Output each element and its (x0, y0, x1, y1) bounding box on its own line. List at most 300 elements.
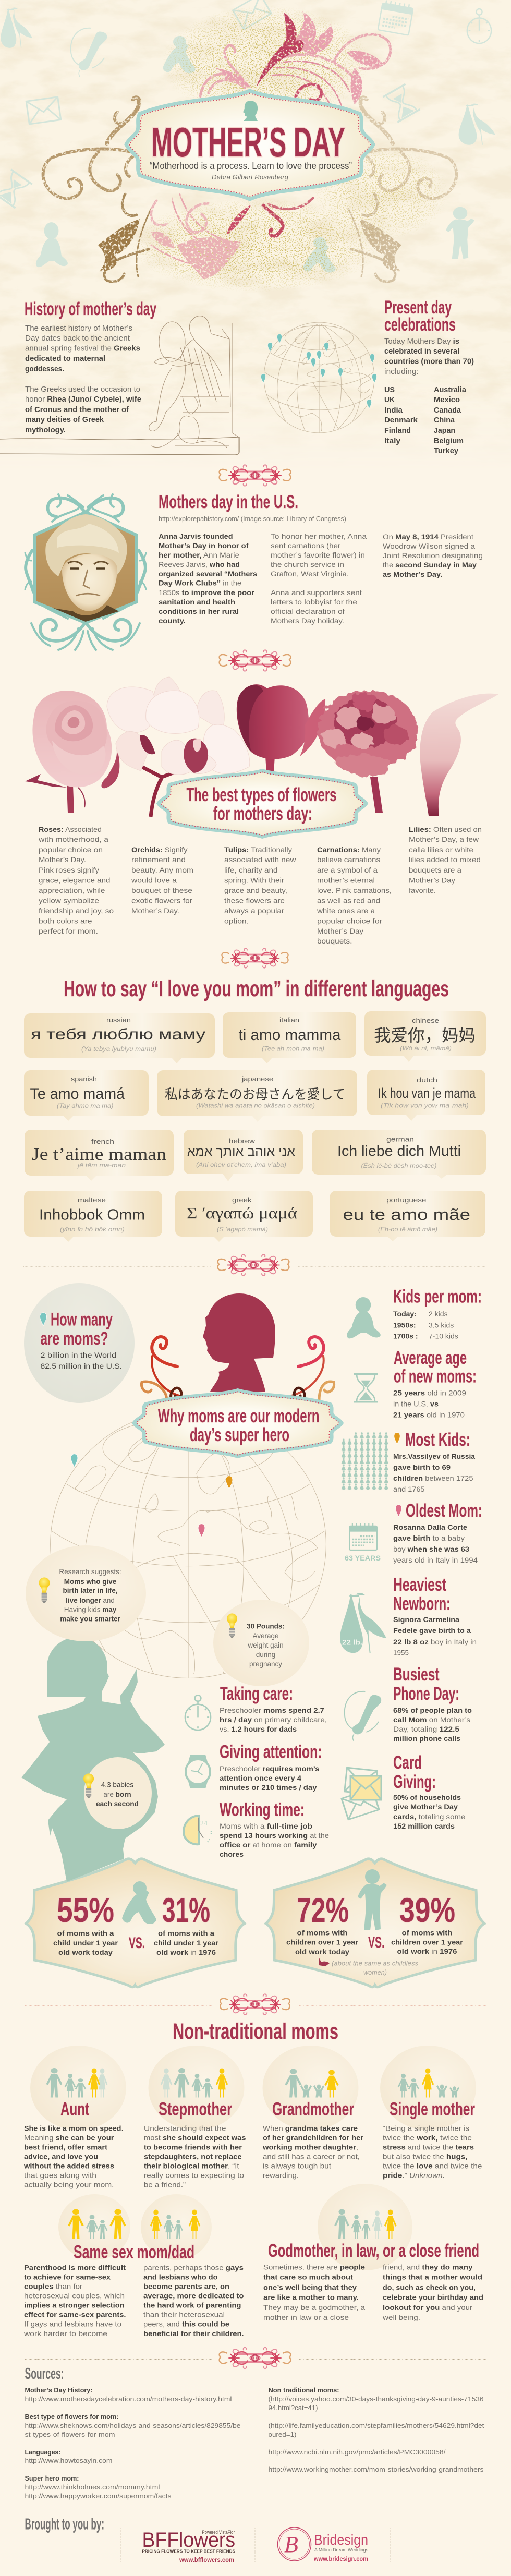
stat: average age: 25 years old in 2009 (393, 1388, 466, 1397)
stat: giving attention: minutes or 210 times / day (220, 1783, 317, 1792)
text column 1: county. (159, 616, 186, 625)
panel: working moms under 1 year: 31% (162, 1891, 210, 1929)
stat: giving attention (186, 1742, 322, 1792)
country list: India (384, 406, 403, 415)
bubble: japanese: (Watashi wa anata no okāsan o aishite) (196, 1102, 315, 1109)
card: stepmother: really comes to expecting to (144, 2171, 244, 2179)
bubble: spanish: spanish (71, 1075, 97, 1083)
card: same sex mom/dad: effect for same-sex parents. (24, 2311, 126, 2319)
panel: working moms over 1 year: 39% (399, 1891, 455, 1929)
heading: History of mother’s day (25, 299, 156, 319)
sources column right: Non traditional moms: (268, 2387, 339, 2394)
text: carnations: mother’s eternal (317, 876, 375, 885)
text: roses (38, 825, 114, 935)
card: same sex mom/dad: work harder to become (23, 2329, 107, 2338)
callout: research suggests: Having kids may (64, 1605, 117, 1614)
faint icons (0, 0, 495, 272)
illustration: goddess statue (149, 316, 239, 454)
panel: working moms under 1 year: old work today (58, 1948, 113, 1956)
logo: Bridesign (277, 2527, 368, 2562)
divider ornament 3 (25, 948, 486, 968)
title badge (126, 91, 373, 199)
text: carnations: white ones are a (317, 906, 375, 915)
text column 1: organized several “Mothers (159, 570, 257, 578)
panel: working moms under 1 year: VS. (129, 1934, 145, 1952)
logo: Bridesign: B (284, 2532, 298, 2557)
text: orchids: exotic flowers for (131, 896, 192, 904)
bubble: maltese (24, 1191, 162, 1242)
stat: heaviest newborn: Newborn: (393, 1594, 451, 1614)
card: godmother: mother in law or a close (263, 2313, 349, 2321)
text block: countries (more than 70) (384, 357, 474, 366)
stat: busiest phone day: million phone calls (393, 1734, 460, 1743)
stat: working time: Moms with a full-time job (220, 1822, 312, 1830)
text: lilies: Mother’s Day, a few (409, 835, 479, 843)
callout: babies born: 4.3 babies (101, 1781, 133, 1789)
sources column right: http://www.workingmother.com/mom-stories/working-grandmothers (268, 2466, 484, 2473)
card: grandmother (262, 2046, 364, 2179)
text: carnations: believe carnations (317, 855, 380, 864)
logo: BFFlowers: Powered VistaFlor (202, 2530, 235, 2535)
stat: taking care: Taking care: (220, 1684, 293, 1704)
sources column left (25, 2387, 241, 2500)
text: lilies: lilies added to mixed (409, 855, 481, 864)
stat: busiest phone day: Day, totaling 122.5 (393, 1725, 459, 1733)
stat: heaviest newborn (340, 1575, 477, 1656)
bubble: german: german (386, 1135, 414, 1143)
card: same sex mom/dad: and lesbians who do (143, 2273, 218, 2281)
bubble: german: Ich liebe dich Mutti (337, 1143, 461, 1159)
card: godmother: friend, and they do many (383, 2263, 473, 2271)
text: tulips: Tulips: Traditionally (224, 845, 292, 854)
text: carnations (317, 845, 392, 945)
callout: 30 pounds: weight gain (247, 1641, 284, 1649)
card: godmother: lookout for you and your (383, 2303, 472, 2312)
parchment texture (0, 0, 511, 469)
bubble: russian (24, 1013, 215, 1063)
sources column left: Mother’s Day History: (25, 2387, 93, 2394)
text block: Today Mothers Day is (384, 337, 459, 346)
text: roses: perfect for mom. (39, 927, 98, 935)
sources column left: http://www.sheknows.com/holidays-and-seasons/articles/829855/be (25, 2422, 241, 2429)
bubble: portuguese (330, 1191, 485, 1241)
country list: Finland (384, 426, 411, 435)
card: same sex mom/dad: than their heterosexual (143, 2311, 225, 2319)
callout: how many are moms (24, 1283, 135, 1403)
stat: busiest phone day (345, 1664, 472, 1743)
card: aunt: advice, and love you (24, 2152, 98, 2160)
stat: card giving: Giving: (393, 1772, 436, 1792)
stat: kids per mom: Today: (393, 1310, 417, 1318)
bubble: portuguese: eu te amo mãe (343, 1205, 470, 1224)
card: godmother: one’s well being that they (263, 2283, 357, 2292)
bubble: japanese: 私はあなたのお母さんを愛して (165, 1084, 345, 1103)
stat: card giving: cards, totaling some (393, 1812, 466, 1821)
image source: http://explorepahistory.com/ (Image source: Library of Congress) (159, 515, 346, 523)
card: single mother: stress and twice the tears (383, 2143, 474, 2151)
quote author: Debra Gilbert Rosenberg (212, 173, 289, 181)
flowers title badge (159, 771, 366, 837)
text column 2: mother’s favorite flower) in (271, 551, 365, 559)
text: orchids: Mother’s Day. (131, 906, 179, 915)
card: single mother: “Being a single mother is (383, 2124, 469, 2132)
stat: oldest mom (345, 1501, 482, 1564)
text: tulips (224, 845, 296, 925)
text column 1: 1850s to improve the poor (159, 588, 255, 597)
portrait frame with flourishes (25, 494, 146, 650)
card: godmother: They may be a godmother, a (263, 2303, 365, 2312)
card: same sex mom/dad: become parents are, on (143, 2282, 229, 2291)
text column 3: the second Sunday in May (383, 561, 477, 569)
text column 1 (159, 532, 257, 625)
stat: most kids: Most Kids: (405, 1430, 470, 1450)
callout: 30 pounds: Average (252, 1632, 279, 1640)
card: stepmother: Stepmother (159, 2099, 232, 2120)
brown flourish left (43, 98, 151, 282)
header panel (0, 0, 495, 292)
icon: mother silhouette (243, 101, 258, 121)
stat: most kids: children between 1725 (393, 1474, 473, 1482)
stat: kids per mom: 3.5 kids (429, 1321, 454, 1329)
panel: working moms over 1 year: VS. (368, 1934, 385, 1951)
text: carnations: popular choice for (317, 917, 382, 925)
callout: 30 pounds: 30 Pounds: (247, 1622, 285, 1630)
illustration: orchid (107, 677, 250, 817)
chart: big globe (51, 1411, 326, 1678)
stat: working time (184, 1799, 329, 1858)
stat: oldest mom: 63 YEARS (345, 1554, 381, 1562)
card: single mother: but also twice the hugs, (383, 2152, 467, 2160)
heading: Present day (384, 297, 452, 318)
callout: babies born: each second (96, 1800, 139, 1808)
heading: Sources: (25, 2364, 64, 2383)
card: aunt (23, 2046, 126, 2188)
card: same sex mom/dad: parents, perhaps those gays (143, 2264, 244, 2272)
stat: kids per mom: 2 kids (429, 1310, 448, 1318)
callout: how many are moms: 2 billion in the World (41, 1351, 116, 1359)
divider ornament 4 (23, 1254, 485, 1276)
card: stepmother (144, 2046, 246, 2188)
text block (25, 324, 141, 434)
card: same sex mom/dad: heterosexual couples, which (24, 2292, 125, 2300)
panel: working moms over 1 year: old work today (295, 1948, 349, 1956)
text column 1: sanitation and health (159, 598, 235, 606)
card: same sex mom/dad: If gays and lesbians have to (24, 2320, 121, 2328)
card: same sex mom/dad: implies a stronger selection (24, 2301, 124, 2309)
text: roses: appreciation, while (39, 886, 105, 894)
text: roses: friendship and joy, so (39, 906, 114, 915)
panel: working moms over 1 year: of moms with (297, 1929, 347, 1937)
heading: Mothers day in the U.S. (159, 492, 298, 512)
panel: working moms under 1 year: of moms with a (57, 1929, 114, 1937)
country list: Mexico (434, 395, 460, 404)
text: orchids: beauty. Any mom (131, 866, 193, 874)
sources column right: (http://voices.yahoo.com/30-days-thanksgiving-day-9-aunties-71536 (268, 2396, 484, 2403)
brown flourish right (348, 98, 456, 282)
card: aunt: without the added stress (23, 2161, 114, 2170)
text column 3: as Mother’s Day. (383, 570, 442, 578)
text: lilies (409, 825, 482, 894)
stat: taking care (185, 1684, 327, 1733)
callout: how many are moms: 82.5 million in the U.S. (41, 1362, 122, 1370)
text: lilies: Mother’s Day (409, 876, 455, 885)
bubble: german: (Ēsh lē-bē dēsh moo-tee) (361, 1162, 437, 1169)
text: tulips: always a popular (224, 906, 284, 915)
text column 2: sent carnations (her (271, 541, 340, 550)
bubble: greek (175, 1191, 313, 1242)
flowers title badge: for mothers day: (213, 803, 312, 824)
stat: average age (354, 1348, 477, 1419)
text column 3 (383, 533, 483, 578)
heading: Brought to you by: (25, 2515, 104, 2533)
card: aunt: Aunt (60, 2099, 89, 2120)
text column 2: To honor her mother, Anna (271, 532, 367, 540)
illustration: tulip (237, 684, 325, 773)
text: tulips: life, charity and (224, 866, 277, 874)
card: grandmother: rewarding. (263, 2171, 299, 2179)
text: roses: with motherhood, a (38, 835, 108, 843)
panel: working moms over 1 year: children over 1 year (286, 1938, 359, 1946)
panel: brought to you by (25, 2515, 390, 2563)
country list: China (434, 416, 455, 425)
panel: working moms under 1 year: child under 1 year (154, 1939, 219, 1947)
bubble: dutch: (Tik how von yow ma-mah) (381, 1102, 469, 1109)
text column 3: Joint Resolution designating (383, 551, 483, 560)
text block (384, 337, 474, 376)
card: grandmother: When grandma takes care (263, 2124, 358, 2132)
callout: 30 pounds (213, 1600, 309, 1686)
card: stepmother: most she should expect was (144, 2133, 246, 2142)
bubble: maltese: (yīnn īn hō bōk omn) (60, 1226, 125, 1233)
bubble: portuguese: portuguese (386, 1196, 427, 1204)
stat: most kids: gave birth to 69 (393, 1463, 451, 1471)
panel: languages (24, 976, 486, 1242)
illustration: rose (25, 691, 119, 813)
bubble: dutch (367, 1070, 485, 1121)
text column 2: Grafton, West Virginia. (271, 570, 349, 578)
stat: card giving: give Mother’s Day (393, 1803, 458, 1811)
stat: card giving: 50% of households (393, 1793, 461, 1801)
text block: The Greeks used the occasion to (25, 385, 140, 394)
text block: mythology. (25, 426, 66, 434)
card: grandmother: Grandmother (272, 2099, 354, 2120)
logo: Bridesign: www.bridesign.com (313, 2555, 368, 2562)
panel: working moms over 1 year: old work in 1976 (397, 1947, 457, 1955)
sources column right: http://www.ncbi.nlm.nih.gov/pmc/articles/PMC3000058/ (268, 2449, 446, 2456)
card: same sex mom/dad: Same sex mom/dad (74, 2242, 194, 2263)
bubble: hebrew: אני אוהב אותך אמא (187, 1144, 295, 1159)
country list (384, 385, 467, 455)
bubble: dutch: dutch (417, 1076, 437, 1084)
text column 2: Anna and supporters sent (271, 588, 362, 597)
divider ornament 6 (25, 2348, 486, 2368)
stat: card giving (342, 1752, 466, 1830)
text: roses: yellow symbolize (39, 896, 99, 904)
panel: working moms over 1 year: 72% (297, 1891, 349, 1929)
card: same sex mom/dad: the hard work of parenting (143, 2301, 241, 2309)
stat: taking care: Preschooler moms spend 2.7 (220, 1706, 324, 1714)
card: stepmother: be a friend.” (144, 2180, 186, 2188)
bubble: german (312, 1130, 486, 1179)
stat: oldest mom: years old in Italy in 1994 (393, 1556, 478, 1564)
stat: oldest mom: gave birth to a baby (393, 1534, 465, 1542)
card: same sex mom/dad: beneficial for their children. (143, 2329, 244, 2338)
sources column right: oured=1) (268, 2431, 296, 2438)
stat: most kids: Mrs.Vassilyev of Russia (393, 1452, 475, 1460)
card: godmother: things that a mother would (383, 2273, 482, 2281)
text block: annual spring festival the Greeks (25, 344, 140, 353)
stat: kids per mom: 1950s: (393, 1321, 416, 1329)
card: aunt: actually being your mom. (24, 2180, 114, 2188)
stat: heaviest newborn: Fedele gave birth to a (393, 1626, 471, 1635)
text block: honor Rhea (Juno/ Cybele), wife (25, 395, 141, 404)
card: aunt: that goes along with (24, 2171, 96, 2179)
hero title badge (134, 1390, 342, 1456)
quote: “Motherhood is a process. Learn to love the process” (150, 161, 352, 171)
text column 1: Day Work Clubs” in the (159, 579, 241, 587)
divider ornament 1 (25, 465, 486, 486)
callout: how many are moms: How many (51, 1309, 113, 1330)
bubble: chinese: chinese (412, 1017, 439, 1024)
text: roses: both colors are (39, 917, 92, 925)
panel: working moms over 1 year: women) (363, 1968, 387, 1976)
logo: BFFlowers: PRICING FLOWERS TO KEEP BEST FRIENDS (142, 2548, 235, 2554)
bubble: greek: Σ ʹαγαπώ μαμά (187, 1204, 297, 1222)
stat: busiest phone day: 68% of people plan to (393, 1706, 472, 1714)
pink flourish bottom (151, 194, 313, 279)
text: orchids: would love a (131, 876, 177, 885)
callout: how many are moms: are moms? (41, 1328, 108, 1349)
logo: BFFlowers: www.bfflowers.com (179, 2556, 234, 2563)
callout: research suggests: live longer and (66, 1597, 115, 1604)
text block: including: (384, 367, 419, 376)
text: tulips: these flowers are (224, 896, 285, 904)
stat: kids per mom: 7-10 kids (429, 1332, 458, 1340)
stat: kids per mom: 1700s : (393, 1332, 418, 1340)
stat: card giving: Card (393, 1752, 422, 1773)
callout: research suggests: make you smarter (60, 1615, 121, 1623)
sources column left: http://www.howtosayin.com (25, 2457, 113, 2464)
bubble: french: french (91, 1138, 114, 1145)
text: roses: Mother’s Day. (39, 855, 86, 864)
hero title badge: day’s super hero (190, 1424, 289, 1445)
stat: working time: Working time: (220, 1799, 305, 1820)
stat: working time: 24 (200, 1820, 208, 1828)
text: carnations: Mother’s Day (317, 927, 363, 935)
text: orchids: refinement and (131, 855, 186, 864)
swirl right (277, 1337, 334, 1402)
bubble: russian: russian (106, 1016, 131, 1024)
sources column left: http://www.happyworker.com/supermom/facts (25, 2493, 171, 2500)
callout: 30 pounds: pregnancy (249, 1660, 282, 1668)
illustration: pregnant mother (21, 1637, 165, 1882)
card: godmother: do, such as check on you, (383, 2283, 476, 2292)
country list: Canada (434, 406, 461, 415)
text: carnations: Carnations: Many (317, 845, 381, 854)
card: stepmother: to become friends with her (144, 2143, 242, 2151)
illustration: mother silhouette (203, 1293, 275, 1392)
country list: Belgium (434, 437, 464, 445)
text: tulips: option. (224, 917, 249, 925)
card: single mother (380, 2046, 482, 2179)
panel: history of mother's day (0, 299, 239, 455)
card: grandmother: working mother daughter , (262, 2143, 358, 2151)
swirl left (141, 1337, 193, 1402)
bubble: hebrew: (Ani ohev ot’chem, ima v’aba) (196, 1161, 286, 1168)
text: roses: Roses: Associated (39, 825, 102, 833)
stat: most kids: and 1765 (393, 1485, 425, 1493)
bubble: spanish: Te amo mamá (30, 1085, 125, 1103)
panel: present day celebrations (261, 297, 474, 455)
text block: celebrated in several (384, 347, 459, 356)
text: roses: popular choice on (39, 845, 103, 854)
panel: super hero moms (24, 1283, 484, 1987)
bubble: italian: (Tee ah-moh ma-ma) (262, 1045, 324, 1053)
text: carnations: bouquets. (317, 937, 352, 945)
card: stepmother: their biological mother . “It (144, 2161, 239, 2170)
callout: 30 pounds: during (256, 1651, 275, 1659)
card: godmother: are like a mother to many. (263, 2293, 359, 2301)
sources column left: http://www.thinkholmes.com/mommy.html (25, 2484, 160, 2491)
callout: babies born: are born (103, 1791, 131, 1798)
sources column right: 94.html?cat=41) (268, 2404, 318, 2412)
stat: average age: Average age (394, 1348, 467, 1368)
text column 3: On May 8, 1914 President (383, 533, 473, 541)
bubble: russian: я тебя люблю маму (31, 1026, 205, 1043)
stat: busiest phone day: call Mom on Mother’s (393, 1715, 470, 1724)
sources column right (268, 2387, 484, 2473)
title: MOTHER’S DAY (151, 119, 345, 165)
heading (384, 297, 456, 335)
card: single mother: pride.” Unknown. (383, 2171, 445, 2179)
sources column left: http://www.mothersdaycelebration.com/mothers-day-history.html (25, 2396, 232, 2403)
stat: oldest mom: Rosanna Dalla Corte (393, 1523, 467, 1531)
stat: busiest phone day: Phone Day: (393, 1684, 459, 1704)
card: single mother: Single mother (390, 2099, 475, 2120)
illustration: carnation (318, 691, 418, 813)
pink flourish top (200, 11, 391, 115)
stat: giving attention: Giving attention: (220, 1742, 322, 1762)
text column 2: official declaration of (271, 607, 345, 615)
card: godmother: that care so much about (263, 2273, 353, 2281)
text: roses: Pink roses signify (39, 866, 99, 874)
panel: non-traditional moms (23, 2019, 483, 2338)
card: godmother (263, 2184, 483, 2321)
text column 1: Reeves Jarvis, who had (159, 560, 240, 569)
bubble: french (25, 1130, 174, 1181)
text column 2 (271, 532, 367, 625)
country list: Australia (434, 385, 467, 394)
chart: globe with pins (261, 322, 376, 433)
text: roses: grace, elegance and (39, 876, 111, 885)
stat: taking care: vs. 1.2 hours for dads (220, 1725, 297, 1733)
bubble: portuguese: (Eh-oo tē ämō mäe) (378, 1226, 437, 1233)
country list: Japan (434, 426, 455, 435)
divider ornament 2 (25, 650, 486, 671)
panel: working moms under 1 year (26, 1859, 245, 1987)
panel: working moms over 1 year (266, 1859, 484, 1987)
stat: average age: 21 years old in 1970 (393, 1410, 465, 1419)
callout: research suggests: birth later in life, (63, 1587, 118, 1594)
sources column left: st-types-of-flowers-for-mom (25, 2431, 115, 2438)
text: carnations: are a symbol of a (317, 866, 378, 874)
stat: working time: spend 13 hours working at the (220, 1831, 329, 1840)
logo: Bridesign: A Million Dream Weddings (314, 2547, 368, 2553)
sources column left: Super hero mom: (25, 2475, 79, 2482)
bubble: chinese (364, 1011, 486, 1062)
sources column left: Languages: (25, 2449, 60, 2456)
card: aunt: best friend, offer smart (24, 2143, 107, 2151)
